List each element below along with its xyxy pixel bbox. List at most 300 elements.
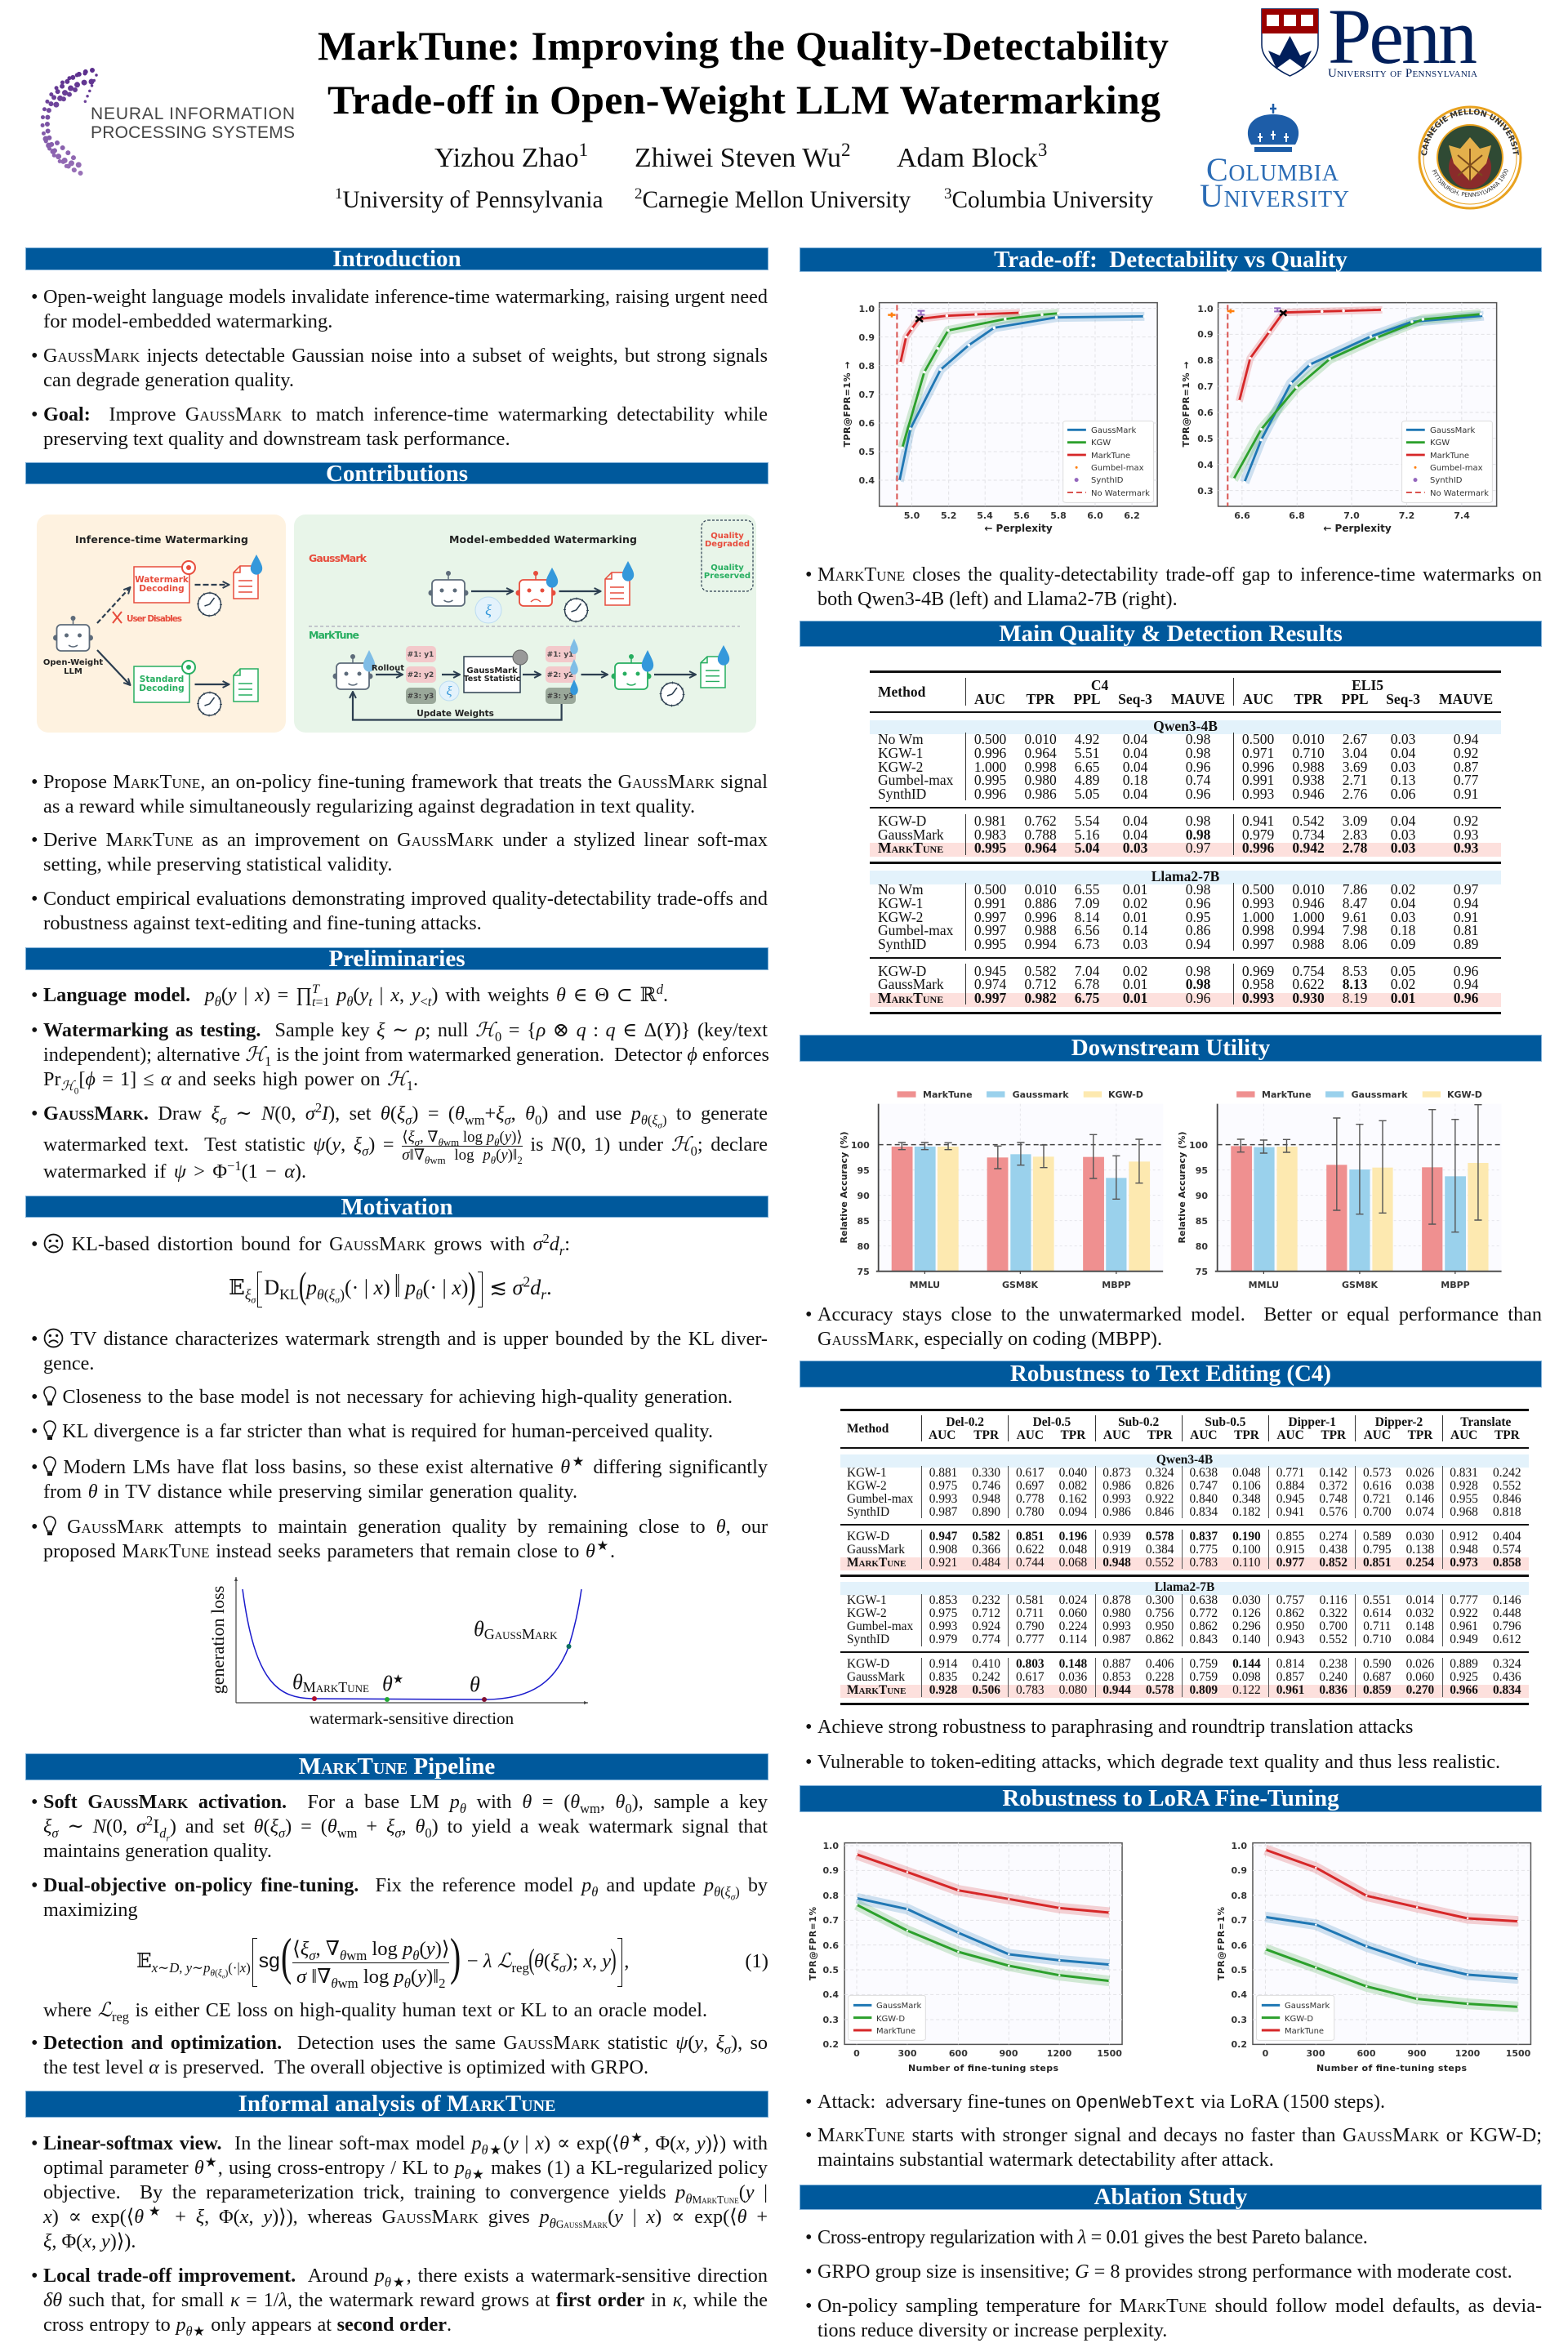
table: quality and detection: 0.93 — [1454, 826, 1478, 843]
panel: robustness to LoRA fine-tuning — [800, 1785, 1542, 2171]
table: quality and detection: 0.01 — [1123, 909, 1147, 925]
table: text editing robustness: 0.993 — [929, 1619, 957, 1633]
equation 1: ) — [450, 1927, 461, 1985]
bullet: attack: Attack: adversary fine-tunes on OpenWebText via LoRA (1500 steps). — [817, 2091, 1385, 2114]
table: quality and detection: 0.74 — [1186, 772, 1210, 788]
bullet: KL divergence: KL divergence is a far stricter than what is required for human-perceived quality. — [62, 1420, 713, 1442]
panel: inference-time watermarking: User Disables — [127, 614, 182, 624]
table: text editing robustness: 0.300 — [1146, 1593, 1174, 1607]
authors: 3 — [1038, 140, 1047, 160]
heading: ablation study: Ablation Study — [1094, 2184, 1247, 2210]
table: text editing robustness: 0.857 — [1276, 1670, 1304, 1684]
table: quality and detection: 0.02 — [1123, 963, 1147, 979]
panel: model-embedded watermarking: ξ — [447, 684, 452, 698]
table: text editing robustness: 0.790 — [1016, 1619, 1045, 1633]
chart: relative accuracy bars: MMLU — [1249, 1280, 1279, 1290]
table: quality and detection: 0.96 — [1186, 759, 1210, 775]
table: quality and detection: 2.76 — [1343, 786, 1367, 802]
table: text editing robustness: 0.783 — [1016, 1683, 1045, 1697]
chart: Llama2-7B fine-tuning: 0.5 — [1232, 1965, 1247, 1976]
table: quality and detection: 0.993 — [1242, 786, 1274, 802]
table: quality and detection: 0.01 — [1123, 881, 1147, 898]
table: quality and detection: 0.94 — [1454, 731, 1478, 747]
bullet: remain close: proposed MarkTune instead seeks parameters that remain close to θ★. — [43, 1538, 615, 1562]
chart: Llama2-7B: 1.0 — [1197, 304, 1214, 314]
table: text editing robustness: 0.878 — [1102, 1593, 1131, 1607]
table: text editing robustness: 0.254 — [1406, 1556, 1434, 1570]
affiliations: 1 — [335, 185, 343, 203]
authors: 1 — [579, 140, 588, 160]
bullet: linear-softmax view: objective. By the reparameterization trick, training to convergence yields pθMarkTune(y | — [43, 2181, 768, 2207]
chart: Llama2-7B: 6.8 — [1289, 510, 1305, 521]
table: quality and detection: 5.04 — [1075, 840, 1099, 856]
table: text editing robustness: 0.100 — [1232, 1543, 1261, 1557]
chart: Llama2-7B: 0.6 — [1197, 408, 1214, 418]
table: quality and detection: 0.92 — [1454, 813, 1478, 829]
table: text editing robustness: 0.928 — [929, 1683, 957, 1697]
panel: inference-time watermarking: Decoding — [139, 584, 185, 594]
panel: model-embedded watermarking: MarkTune — [309, 629, 359, 641]
table: text editing robustness: 0.700 — [1363, 1504, 1392, 1519]
affiliations: University of Pennsylvania — [343, 187, 603, 213]
table: quality and detection: 0.974 — [974, 976, 1006, 992]
title: MarkTune: Improving the Quality-Detectability — [318, 23, 1169, 69]
chart: Qwen3-4B fine-tuning: 0.5 — [823, 1965, 839, 1976]
panel: inference-time watermarking: Open-Weight — [43, 658, 103, 667]
table: quality and detection: 8.47 — [1343, 895, 1367, 911]
table: text editing robustness: 0.862 — [1276, 1606, 1304, 1620]
bullet: KL-based distortion bound: KL-based distortion bound for GaussMark grows with σ2dr: — [72, 1231, 570, 1258]
chart: Llama2-7B: ← Perplexity — [1323, 523, 1392, 534]
panel: model-embedded watermarking: GaussMark — [309, 552, 368, 564]
table: quality and detection: 3.69 — [1343, 759, 1367, 775]
table: quality and detection: 0.98 — [1186, 731, 1210, 747]
chart: Qwen3-4B: 5.2 — [941, 510, 956, 521]
bullet: linear-softmax view: x) ∝ exp(⟨θ★ + ξ, Φ(x, y)⟩), whereas GaussMark gives pθGaussMark(y | x) ∝ exp(⟨θ + — [43, 2203, 768, 2231]
table: quality and detection: 0.03 — [1123, 840, 1147, 856]
table: quality and detection: 0.734 — [1292, 826, 1325, 843]
bullet: empirical evaluations: Conduct empirical evaluations demonstrating improved quality-detectability trade-offs and — [43, 888, 768, 910]
table: text editing robustness: 0.853 — [929, 1593, 957, 1607]
table: quality and detection: 0.91 — [1454, 786, 1478, 802]
chart: Qwen3-4B fine-tuning — [808, 1841, 1122, 2074]
table: quality and detection: 0.04 — [1123, 759, 1147, 775]
chart: relative accuracy bars: 90 — [857, 1191, 870, 1201]
chart: Qwen3-4B: 0.5 — [859, 447, 875, 457]
chart: Llama2-7B fine-tuning: 300 — [1307, 2048, 1325, 2059]
table: text editing robustness: 0.757 — [1276, 1593, 1304, 1607]
table: text editing robustness: 0.140 — [1232, 1633, 1261, 1646]
table: quality and detection: 0.998 — [1024, 759, 1057, 775]
panel: model-embedded watermarking: GaussMark — [466, 666, 518, 675]
table: text editing robustness: 0.484 — [972, 1556, 1000, 1570]
table: text editing robustness: 0.126 — [1232, 1606, 1261, 1620]
chart: Qwen3-4B fine-tuning: 900 — [1000, 2048, 1018, 2059]
table: quality and detection: 0.94 — [1454, 976, 1478, 992]
chart: Qwen3-4B: 0.8 — [859, 361, 875, 372]
table: quality and detection: PPL — [1342, 691, 1369, 707]
chart: relative accuracy bars: 85 — [1196, 1216, 1208, 1227]
table: quality and detection: 0.542 — [1292, 813, 1325, 829]
bullet: GaussMark definition: σ‖∇θwm log pθ(y)‖2 — [402, 1147, 523, 1166]
table: quality and detection: 0.04 — [1391, 895, 1415, 911]
bullet: closeness: Closeness to the base model is not necessary for achieving high-quality generation. — [62, 1386, 733, 1408]
panel: inference-time watermarking: LLM — [64, 667, 82, 676]
chart: Qwen3-4B: KGW — [1091, 439, 1111, 448]
bullet: GaussMark definition: watermarked if ψ > Φ−1(1 − α). — [43, 1158, 306, 1183]
table: quality and detection: 4.92 — [1075, 731, 1099, 747]
chart: relative accuracy bars: MarkTune — [1262, 1089, 1312, 1100]
table: quality and detection: 0.996 — [1242, 759, 1274, 775]
title — [318, 23, 1169, 122]
table: text editing robustness: 0.324 — [1146, 1465, 1174, 1480]
table: text editing robustness: 0.949 — [1450, 1633, 1478, 1646]
bullet: local trade-off improvement: cross entropy to pθ★ only appears at second order. — [43, 2314, 452, 2339]
bullet: derive MarkTune — [43, 828, 768, 877]
table: text editing robustness: 0.138 — [1406, 1543, 1434, 1557]
table: quality and detection: 0.500 — [1242, 881, 1274, 898]
table: quality and detection: 0.994 — [1024, 936, 1057, 952]
table: quality and detection — [870, 670, 1501, 1014]
chart: Qwen3-4B fine-tuning: 0.7 — [823, 1915, 839, 1926]
table: quality and detection: 6.78 — [1075, 976, 1099, 992]
table: text editing robustness: 0.915 — [1276, 1543, 1304, 1557]
table: quality and detection: 5.16 — [1075, 826, 1099, 843]
chart: Qwen3-4B: 0.7 — [859, 390, 875, 400]
table: text editing robustness: 0.573 — [1363, 1465, 1392, 1480]
table: text editing robustness: 0.242 — [1493, 1465, 1521, 1480]
bullet: accuracy caption: Accuracy stays close to the unwatermarked model. Better or equal performance than — [817, 1303, 1542, 1325]
table: quality and detection: 0.81 — [1454, 922, 1478, 938]
table: text editing robustness: SynthID — [847, 1504, 889, 1519]
table: quality and detection: 0.988 — [1292, 759, 1325, 775]
panel: main quality and detection results — [800, 621, 1542, 1014]
chart: Llama2-7B: TPR@FPR=1% → — [1181, 361, 1192, 448]
chart: Qwen3-4B: 5.0 — [904, 510, 920, 521]
chart: relative accuracy bars: Gaussmark — [1352, 1089, 1408, 1100]
bullet: soft GaussMark activation: ξσ ∼ N(0, σ2Idr) and set θ(ξσ) = (θwm + ξσ, θ0) to yield a weak watermark signal that — [43, 1813, 768, 1843]
bullet: trade-off caption: both Qwen3-4B (left) and Llama2-7B (right). — [817, 588, 1178, 610]
equation 1: ) — [610, 1943, 617, 1976]
bullet: on-policy temperature: tions reduce diversity or increase perplexity. — [817, 2319, 1167, 2341]
table: quality and detection: 0.04 — [1123, 786, 1147, 802]
table: text editing robustness: 0.436 — [1493, 1670, 1521, 1684]
chart: Llama2-7B fine-tuning: Number of fine-tuning steps — [1316, 2063, 1467, 2074]
table: text editing robustness: 0.775 — [1189, 1543, 1218, 1557]
bullet: linear-softmax view: ξ, Φ(x, y)⟩). — [43, 2230, 136, 2252]
logo: Columbia: University — [1200, 177, 1349, 214]
equation: KL bound: 𝔼ξσ DKL pθ(ξσ)(· | x) pθ(· | x) ≲ σ2dr. — [229, 1273, 552, 1306]
table: text editing robustness: 0.993 — [1102, 1619, 1131, 1633]
panel: robustness to text editing — [800, 1361, 1542, 1773]
heading: motivation — [25, 1196, 768, 1218]
panel: model-embedded watermarking: Model-embedded Watermarking — [449, 533, 637, 546]
table: quality and detection: 0.958 — [1242, 976, 1274, 992]
table: quality and detection: 2.71 — [1343, 772, 1367, 788]
table: quality and detection: 5.05 — [1075, 786, 1099, 802]
table: quality and detection: 0.04 — [1123, 745, 1147, 761]
table: text editing robustness: KGW-D — [847, 1530, 889, 1544]
table: text editing robustness: 0.835 — [929, 1670, 957, 1684]
table: quality and detection: 1.000 — [1292, 909, 1325, 925]
table: text editing robustness: 0.224 — [1059, 1619, 1087, 1633]
table: text editing robustness: AUC — [1190, 1428, 1218, 1442]
table: quality and detection: KGW-1 — [878, 745, 923, 761]
chart: Qwen3-4B: 6.0 — [1087, 510, 1103, 521]
panel: model-embedded watermarking: ξ — [485, 602, 492, 618]
table: text editing robustness: 0.384 — [1146, 1543, 1174, 1557]
table: text editing robustness: 0.068 — [1059, 1556, 1087, 1570]
table: text editing robustness: 0.330 — [972, 1465, 1000, 1480]
table: text editing robustness: 0.852 — [1319, 1556, 1348, 1570]
table: quality and detection: 6.55 — [1075, 881, 1099, 898]
table: quality and detection: 0.988 — [1024, 922, 1057, 938]
chart: Llama2-7B: 0.4 — [1197, 460, 1214, 470]
table: quality and detection: AUC — [1243, 691, 1274, 707]
table: text editing robustness: 0.612 — [1493, 1633, 1521, 1646]
table: text editing robustness: 0.836 — [1319, 1683, 1348, 1697]
table: quality and detection: 0.996 — [1024, 909, 1057, 925]
bullet: linear-softmax view: optimal parameter θ★, using cross-entropy / KL to pθ★ makes (1) a KL-regularized policy — [43, 2154, 768, 2182]
bullet: KL-based distortion bound — [43, 1232, 768, 1257]
table: text editing robustness: KGW-2 — [847, 1606, 887, 1620]
table: quality and detection: SynthID — [878, 936, 926, 952]
table: text editing robustness: 0.576 — [1319, 1504, 1348, 1519]
logo: Columbia — [1200, 104, 1349, 214]
table: text editing robustness: 0.617 — [1016, 1465, 1045, 1480]
table: text editing robustness: 0.700 — [1319, 1619, 1348, 1633]
chart: Qwen3-4B fine-tuning: GaussMark — [876, 2002, 922, 2011]
table: text editing robustness: 0.098 — [1232, 1670, 1261, 1684]
equation: KL bound: ‖ — [394, 1267, 400, 1304]
table: quality and detection: 0.14 — [1123, 922, 1147, 938]
chart: generation loss curve: ★ — [393, 1673, 403, 1686]
table: quality and detection: 0.988 — [1292, 936, 1325, 952]
table: quality and detection: 0.993 — [1242, 990, 1274, 1006]
chart: Llama2-7B fine-tuning: GaussMark — [1285, 2002, 1330, 2011]
table: quality and detection: 0.981 — [974, 813, 1006, 829]
table: quality and detection: 0.09 — [1391, 936, 1415, 952]
table: text editing robustness: 0.846 — [1146, 1504, 1174, 1519]
table: text editing robustness: 0.950 — [1146, 1619, 1174, 1633]
table: quality and detection: TPR — [1026, 691, 1055, 707]
table: text editing robustness: 0.948 — [1102, 1556, 1131, 1570]
table: quality and detection: 0.91 — [1454, 909, 1478, 925]
table: text editing robustness: 0.831 — [1450, 1465, 1478, 1480]
table: text editing robustness: 0.795 — [1363, 1543, 1392, 1557]
table: quality and detection: 0.01 — [1123, 976, 1147, 992]
table: quality and detection: 0.97 — [1454, 881, 1478, 898]
table: text editing robustness: 0.908 — [929, 1543, 957, 1557]
chart: Llama2-7B fine-tuning: 0.3 — [1232, 2015, 1247, 2025]
chart: relative accuracy bars: 95 — [857, 1165, 870, 1176]
chart: Llama2-7B — [1181, 303, 1497, 534]
panel: model-embedded watermarking: Quality — [710, 532, 744, 541]
equation: KL bound: ( — [299, 1264, 306, 1306]
table: quality and detection: 0.996 — [1242, 840, 1274, 856]
table: quality and detection: 7.09 — [1075, 895, 1099, 911]
table: text editing robustness: TPR — [1234, 1428, 1259, 1442]
chart: Llama2-7B fine-tuning: KGW-D — [1285, 2015, 1313, 2024]
panel: model-embedded watermarking: #2: y2 — [547, 671, 573, 679]
table: quality and detection: 0.991 — [974, 895, 1006, 911]
chart: relative accuracy bars: MBPP — [1441, 1280, 1470, 1290]
bullet: local trade-off improvement — [43, 2264, 768, 2337]
table: quality and detection: 0.500 — [1242, 731, 1274, 747]
table: text editing robustness: Sub-0.2 — [1118, 1414, 1159, 1429]
bullet: language model: Language model. pθ(y | x) = ∏ pθ(yt | x, y<t) with weights θ ∈ Θ ⊂ ℝd. — [43, 982, 668, 1009]
table: text editing robustness: 0.552 — [1493, 1478, 1521, 1493]
table: text editing robustness: 0.578 — [1146, 1530, 1174, 1544]
table: quality and detection: 0.500 — [974, 731, 1006, 747]
table: quality and detection: 8.14 — [1075, 909, 1099, 925]
bullet: GaussMark: GaussMark injects detectable Gaussian noise into a subset of weights, but strong signals — [43, 345, 768, 367]
table: quality and detection: 6.65 — [1075, 759, 1099, 775]
chart: Llama2-7B fine-tuning: 900 — [1408, 2048, 1427, 2059]
bullet: open-weight models: Open-weight language models invalidate inference-time watermarking, raising urgent need — [43, 286, 768, 308]
table: text editing robustness: 0.406 — [1146, 1657, 1174, 1671]
chart: Llama2-7B fine-tuning: TPR@FPR=1% — [1217, 1907, 1227, 1980]
panel: informal analysis — [25, 2091, 768, 2339]
table: text editing robustness: 0.851 — [1363, 1556, 1392, 1570]
table: quality and detection: Llama2-7B — [1152, 868, 1219, 884]
bullet: local trade-off improvement: Local trade-off improvement. Around pθ★, there exists a watermark-sensitive direction — [43, 2265, 768, 2290]
table: quality and detection: 0.996 — [974, 745, 1006, 761]
table: text editing robustness: 0.324 — [1493, 1657, 1521, 1671]
table: text editing robustness: 0.777 — [1450, 1593, 1478, 1607]
logo: NeurIPS — [42, 70, 295, 175]
bullet: local trade-off improvement: δθ such that, for small κ = 1/λ, the watermark reward grows at first order in κ, while the — [43, 2289, 768, 2311]
table: text editing robustness: 0.834 — [1493, 1683, 1521, 1697]
table: text editing robustness: 0.853 — [1102, 1670, 1131, 1684]
table: quality and detection: Seq-3 — [1118, 691, 1152, 707]
chart: Llama2-7B fine-tuning — [1217, 1841, 1531, 2074]
chart: Qwen3-4B: 0.6 — [859, 418, 875, 429]
authors: Yizhou Zhao — [434, 143, 579, 173]
bars: right chart — [1231, 1146, 1489, 1272]
table: quality and detection: 7.98 — [1343, 922, 1367, 938]
bullet: trade-off caption: MarkTune closes the quality-detectability trade-off gap to inference-time watermarks on — [817, 564, 1542, 586]
table: quality and detection: 0.942 — [1292, 840, 1325, 856]
chart: Qwen3-4B: GaussMark — [1091, 426, 1137, 435]
table: quality and detection: 0.98 — [1186, 745, 1210, 761]
equation 1: ( — [528, 1943, 535, 1976]
chart: generation loss curve: MarkTune — [303, 1679, 369, 1695]
table: text editing robustness: 0.924 — [972, 1619, 1000, 1633]
table: quality and detection: 0.04 — [1391, 745, 1415, 761]
table: text editing robustness: 0.987 — [929, 1504, 957, 1519]
table: text editing robustness: 0.082 — [1059, 1478, 1087, 1493]
heading: motivation: Motivation — [341, 1194, 452, 1220]
table: text editing robustness: 0.687 — [1363, 1670, 1392, 1684]
table: text editing robustness: 0.142 — [1319, 1465, 1348, 1480]
chart: relative accuracy bars: 85 — [857, 1216, 870, 1227]
table: quality and detection: 2.78 — [1343, 840, 1367, 856]
table: text editing robustness: 0.846 — [1493, 1491, 1521, 1506]
table: quality and detection: 0.995 — [974, 936, 1006, 952]
table: text editing robustness: 0.710 — [1363, 1633, 1392, 1646]
table: text editing robustness: 0.980 — [1102, 1606, 1131, 1620]
table: text editing robustness: Dipper-1 — [1288, 1414, 1336, 1429]
table: quality and detection: 0.01 — [1123, 990, 1147, 1006]
bullet: goal: preserving text quality and downstream task performance. — [43, 428, 510, 450]
table: quality and detection: 0.92 — [1454, 745, 1478, 761]
table: text editing robustness: 0.196 — [1059, 1530, 1087, 1544]
table: quality and detection: 0.05 — [1391, 963, 1415, 979]
table: quality and detection: 6.56 — [1075, 922, 1099, 938]
bullet: where L_reg: where ℒreg is either CE loss on high-quality human text or KL to an oracle model. — [43, 1999, 707, 2025]
table: text editing robustness: 0.114 — [1059, 1633, 1087, 1646]
heading: robustness to text editing: Robustness to Text Editing (C4) — [1010, 1361, 1331, 1387]
table: text editing robustness: 0.922 — [1146, 1491, 1174, 1506]
table: quality and detection: No Wm — [878, 881, 924, 898]
table: quality and detection: Gumbel-max — [878, 772, 953, 788]
chart: Llama2-7B: 7.0 — [1343, 510, 1360, 521]
table: quality and detection: 0.998 — [1242, 922, 1274, 938]
header: title, authors and logos — [41, 0, 1522, 214]
table: text editing robustness: 0.274 — [1319, 1530, 1348, 1544]
table: text editing robustness: 0.322 — [1319, 1606, 1348, 1620]
table: quality and detection: 0.04 — [1123, 826, 1147, 843]
panel: model-embedded watermarking: #3: y3 — [408, 693, 434, 701]
heading: MarkTune pipeline — [25, 1753, 768, 1780]
chart: relative accuracy bars: 75 — [857, 1267, 870, 1277]
chart: Qwen3-4B: MarkTune — [1091, 452, 1130, 461]
bullet: derive MarkTune: Derive MarkTune as an improvement on GaussMark under a stylized linear soft-max — [43, 829, 768, 851]
table: text editing robustness: 0.862 — [1146, 1633, 1174, 1646]
table: text editing robustness: 0.551 — [1363, 1593, 1392, 1607]
table: quality and detection: 0.04 — [1123, 813, 1147, 829]
table: text editing robustness: 0.040 — [1059, 1465, 1087, 1480]
table: quality and detection: 0.89 — [1454, 936, 1478, 952]
authors: 2 — [841, 140, 850, 160]
table: text editing robustness: 0.232 — [972, 1593, 1000, 1607]
table: text editing robustness: 0.614 — [1363, 1606, 1392, 1620]
table: text editing robustness: 0.944 — [1102, 1683, 1131, 1697]
table: quality and detection: 0.02 — [1391, 976, 1415, 992]
chart: generation loss curve: GaussMark — [484, 1626, 558, 1642]
table: quality and detection: 0.03 — [1391, 840, 1415, 856]
table: text editing robustness: 0.818 — [1493, 1504, 1521, 1519]
equation 1: σ ‖∇θwm log pθ(y)‖2 — [296, 1966, 446, 1991]
table: text editing robustness: 0.148 — [1406, 1619, 1434, 1633]
table: quality and detection: 0.622 — [1292, 976, 1325, 992]
table: text editing robustness: 0.026 — [1406, 1465, 1434, 1480]
chart: Qwen3-4B fine-tuning: 300 — [898, 2048, 917, 2059]
table: text editing robustness: 0.638 — [1189, 1465, 1218, 1480]
table: text editing robustness: 0.961 — [1276, 1683, 1304, 1697]
chart: Llama2-7B: KGW — [1430, 439, 1450, 448]
table: quality and detection: 0.946 — [1292, 786, 1325, 802]
table: text editing robustness: TPR — [973, 1428, 999, 1442]
chart: Qwen3-4B: 0.9 — [859, 332, 875, 343]
chart: generation loss curve: θ — [382, 1672, 393, 1695]
panel: motivation — [25, 1194, 768, 1728]
logo: Carnegie Mellon seal — [1418, 106, 1522, 209]
table: text editing robustness: 0.948 — [1450, 1543, 1478, 1557]
chart: relative accuracy bars: Gaussmark — [1013, 1089, 1069, 1100]
table: text editing robustness: 0.939 — [1102, 1530, 1131, 1544]
table: text editing robustness: 0.778 — [1016, 1491, 1045, 1506]
bullet: on-policy temperature — [817, 2294, 1542, 2343]
panel: inference-time watermarking: Decoding — [139, 684, 185, 693]
table: quality and detection: 0.86 — [1186, 922, 1210, 938]
table: text editing robustness: TPR — [1494, 1428, 1520, 1442]
table: text editing robustness: 0.826 — [1146, 1478, 1174, 1493]
panel: ablation study — [800, 2184, 1542, 2341]
heading: trade-off — [800, 247, 1542, 272]
bullet: GaussMark definition — [43, 1102, 768, 1184]
